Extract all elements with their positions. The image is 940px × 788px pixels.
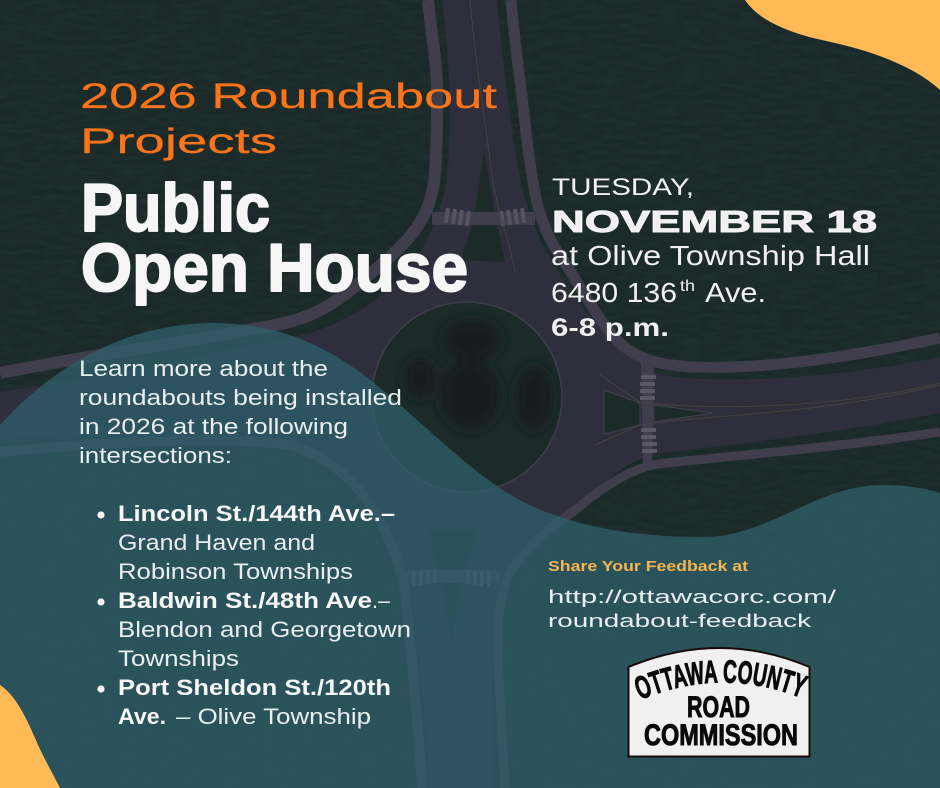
bullet 2 bbox=[97, 598, 105, 606]
logo text: OTTAWA COUNTY bbox=[634, 660, 810, 698]
feedback url bbox=[548, 587, 836, 631]
event details: 6480 136 bbox=[551, 277, 677, 308]
item 3: Port Sheldon St./120th bbox=[118, 675, 391, 700]
orange corner: bottom left bbox=[0, 685, 60, 788]
south splitter islands bbox=[428, 530, 478, 645]
list of intersections: Townships bbox=[118, 646, 239, 671]
list of intersections: .– bbox=[372, 588, 391, 613]
item 2: Baldwin St./48th Ave bbox=[118, 588, 372, 613]
bullet 3 bbox=[97, 685, 105, 693]
list of intersections: Ave. bbox=[118, 704, 166, 729]
event details: NOVEMBER 18 bbox=[552, 204, 877, 239]
road centre lines bbox=[470, 0, 940, 445]
list of intersections: Grand Haven and bbox=[118, 530, 315, 555]
heading: 2026 Roundabout Projects: 2026 Roundabout bbox=[80, 77, 497, 116]
event details: Ave. bbox=[705, 277, 766, 308]
feedback heading: Share Your Feedback at bbox=[548, 559, 748, 575]
logo text: ROAD bbox=[687, 691, 750, 724]
central island bbox=[372, 302, 562, 492]
intro text: in 2026 at the following bbox=[79, 414, 348, 439]
feedback url: roundabout-feedback bbox=[548, 611, 813, 631]
event details bbox=[551, 174, 877, 342]
list of intersections: Robinson Townships bbox=[118, 559, 353, 584]
orange corner: top right bbox=[745, 0, 940, 90]
title: Public Open House: Public bbox=[81, 170, 270, 246]
event details: at Olive Township Hall bbox=[551, 240, 870, 271]
intro text: Learn more about the bbox=[79, 356, 328, 381]
island trees bbox=[404, 320, 552, 430]
intro text: intersections: bbox=[79, 443, 232, 468]
item 1: Lincoln St./144th Ave.– bbox=[118, 501, 395, 526]
logo: Ottawa County Road Commission bbox=[628, 647, 810, 758]
intro text: roundabouts being installed bbox=[79, 385, 402, 410]
intro text bbox=[79, 356, 402, 468]
logo sign shape bbox=[628, 648, 810, 756]
north pedestrian crossing bbox=[432, 208, 535, 226]
bullet 1 bbox=[97, 511, 105, 519]
list of intersections: Blendon and Georgetown bbox=[118, 617, 411, 642]
event details: 6-8 p.m. bbox=[551, 314, 669, 342]
east pedestrian crossing bbox=[640, 360, 657, 468]
list of intersections: – Olive Township bbox=[176, 704, 371, 729]
title: Public Open House: Open House bbox=[81, 230, 468, 306]
logo text bbox=[634, 660, 810, 752]
north splitter islands bbox=[461, 150, 505, 262]
teal wave panel bbox=[0, 323, 940, 788]
feedback url: http://ottawacorc.com/ bbox=[548, 587, 836, 607]
event details: TUESDAY, bbox=[552, 174, 694, 201]
heading: 2026 Roundabout Projects: Projects bbox=[80, 122, 277, 161]
east splitter islands bbox=[604, 390, 713, 434]
south pedestrian crossing bbox=[400, 569, 500, 587]
event details: th bbox=[680, 278, 695, 295]
title: Public Open House bbox=[81, 170, 468, 306]
list of intersections bbox=[97, 501, 411, 729]
heading: 2026 Roundabout Projects bbox=[80, 77, 497, 161]
logo text: COMMISSION bbox=[644, 719, 798, 752]
